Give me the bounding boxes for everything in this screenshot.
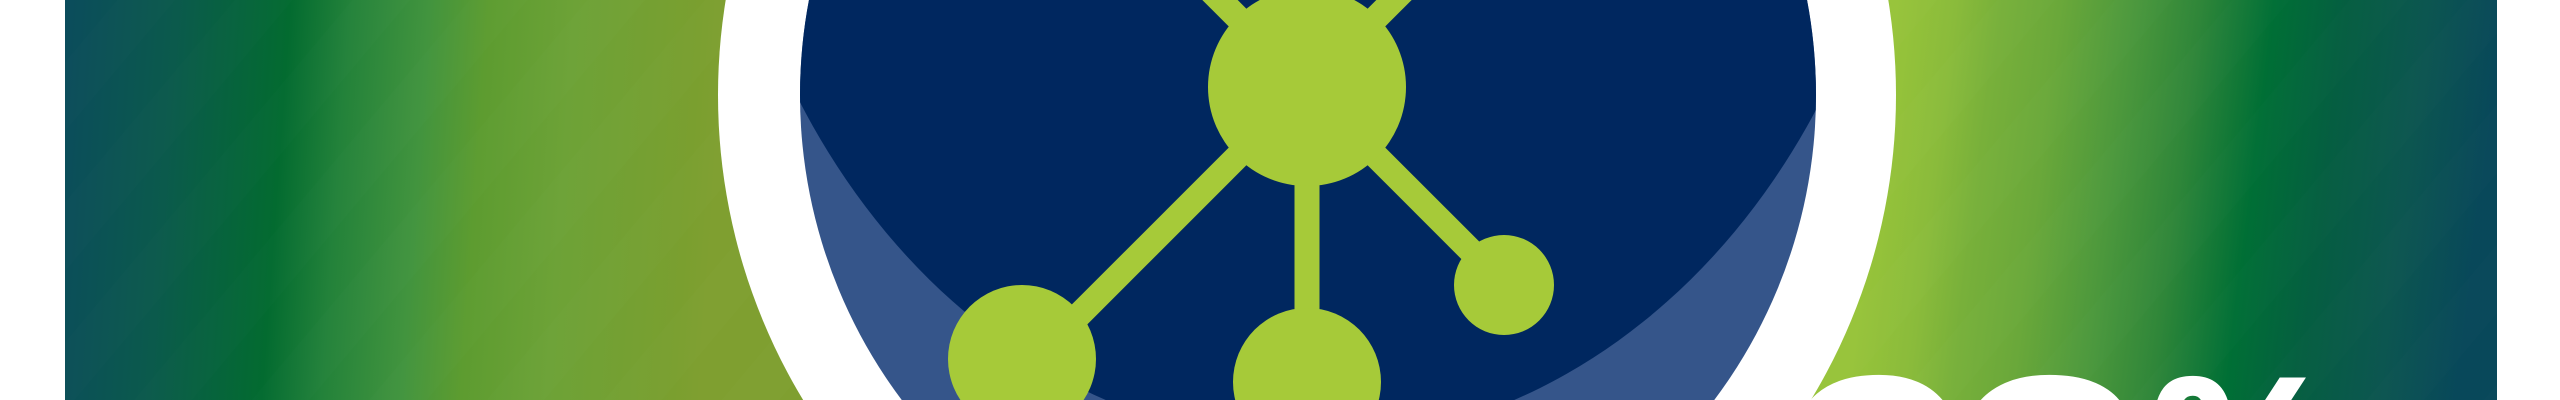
statistic: percentage figure	[1811, 374, 2306, 400]
icon: network of connected nodes	[948, 0, 1554, 400]
white ring	[718, 0, 1896, 400]
navy upper shape	[800, 0, 1816, 400]
lower lighter blue disc	[800, 0, 1816, 400]
